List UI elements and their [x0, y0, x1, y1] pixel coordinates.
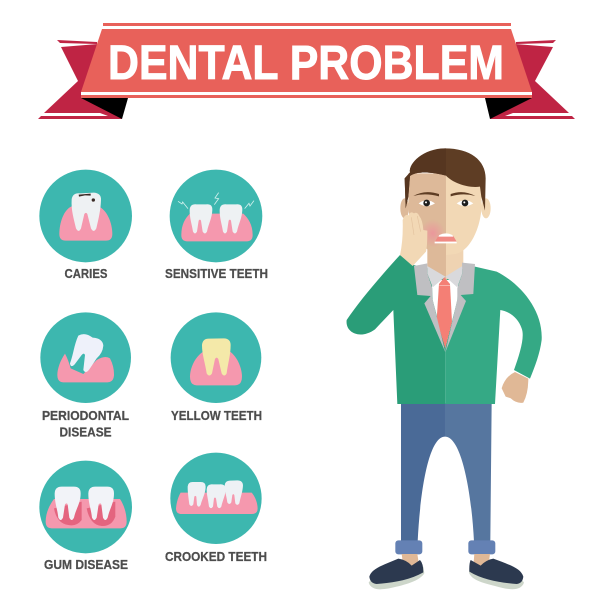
icon: caries — [39, 170, 132, 262]
fist — [502, 372, 528, 403]
icon: yellow teeth — [171, 312, 261, 403]
hair — [405, 148, 486, 211]
mouth — [435, 234, 457, 242]
icon: periodontal disease — [40, 312, 131, 403]
ribbon left tail — [38, 40, 128, 119]
label: gum disease: GUM DISEASE — [44, 558, 128, 572]
label: caries: CARIES — [64, 267, 108, 281]
label: periodontal disease: PERIODONTAL — [42, 409, 129, 423]
hand on cheek — [400, 212, 427, 266]
icon: crooked teeth — [170, 453, 262, 544]
shirt and collar — [432, 280, 458, 348]
label: periodontal disease — [42, 409, 129, 440]
title: DENTAL PROBLEM — [108, 37, 504, 90]
icon: gum disease — [39, 461, 132, 553]
jacket — [347, 255, 445, 404]
character: man with toothache — [347, 148, 542, 589]
label: periodontal disease: DISEASE — [60, 426, 112, 440]
ribbon right tail — [485, 40, 575, 119]
legs and shoes — [369, 403, 524, 589]
eyes — [419, 200, 435, 206]
head — [400, 198, 409, 218]
neck — [427, 247, 446, 280]
banner: dental problem ribbon — [38, 23, 575, 119]
label: sensitive teeth: SENSITIVE TEETH — [165, 267, 268, 281]
ribbon main band — [81, 29, 532, 92]
label: yellow teeth: YELLOW TEETH — [171, 409, 262, 423]
tie — [437, 277, 452, 348]
cheek blush — [420, 219, 445, 247]
eyebrows — [413, 192, 439, 196]
lapels — [414, 263, 445, 352]
label: crooked teeth: CROOKED TEETH — [165, 550, 267, 564]
icon: sensitive teeth — [170, 170, 262, 262]
